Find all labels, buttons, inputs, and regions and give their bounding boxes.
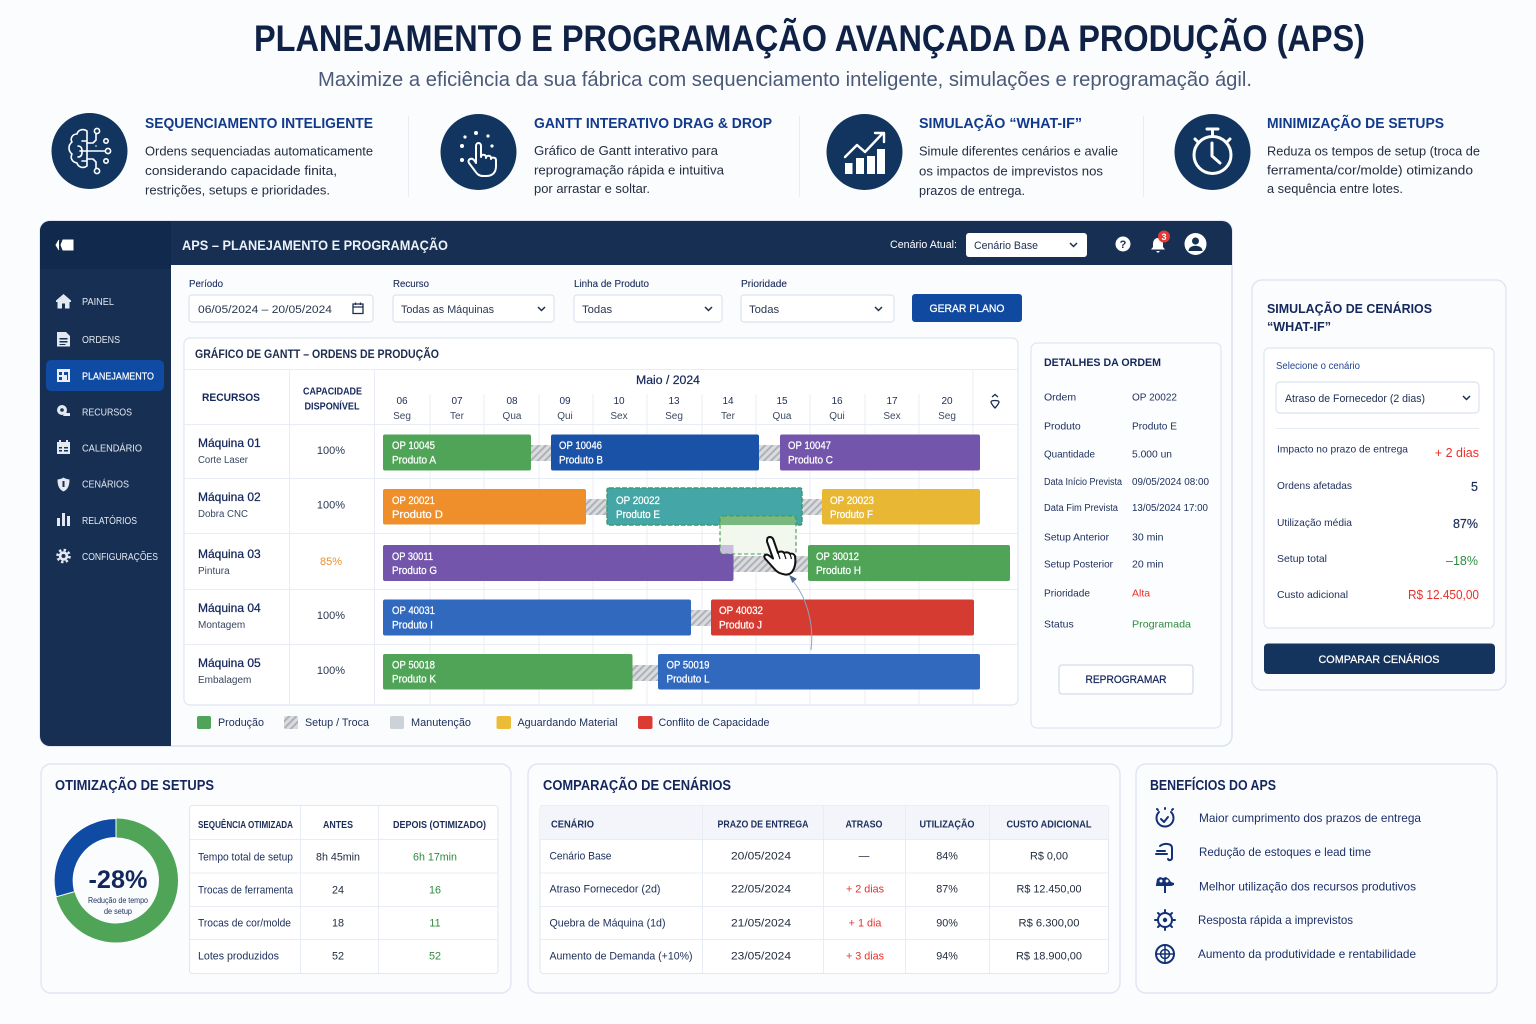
benefit: prazos [1156,808,1421,827]
benefit: estoques [1156,844,1371,860]
timeline days: 17 [886,396,898,407]
capacity values: 100% [317,500,345,512]
metric: ordens afetadas: Ordens afetadas [1277,480,1352,492]
timeline days: Sex [883,411,901,422]
bar: OP 10047: OP 10047 [788,440,831,452]
simulation card [1264,348,1494,628]
scenario select [1276,382,1479,413]
feature: minimizacao de setups [1174,114,1480,196]
bar: OP 10045: OP 10045 [392,440,435,452]
menu: cenarios: CENÁRIOS [82,478,129,490]
bar: OP 40031: OP 40031 [392,605,435,617]
row: atraso fornecedor: Atraso Fornecedor (2d) [550,884,660,896]
row: atraso fornecedor [550,884,1082,896]
timeline days: 08 [506,396,518,407]
app title: APS – PLANEJAMENTO E PROGRAMAÇÃO [182,238,448,253]
row: atraso fornecedor: + 2 dias [846,884,885,896]
bar: OP 50018 [383,654,632,690]
bar: OP 10046: Produto B [559,454,603,466]
metric: utilizacao media: 87% [1453,517,1478,531]
button: gerar plano [912,294,1022,322]
table header: SEQUÊNCIA OTIMIZADA [198,818,293,831]
icon: profile [1184,233,1206,255]
table rows: 11 [429,918,441,930]
details rows: Data Início Prevista [1044,477,1122,488]
benefit: recursos [1156,877,1416,894]
icon: brain circuit [52,113,128,189]
panel: aplicativo APS [40,221,1232,746]
button: comparar cenarios: COMPARAR CENÁRIOS [1318,653,1440,666]
arrow: drag path [790,576,812,650]
metric: setup total [1277,553,1478,568]
timeline days: 15 [776,396,788,407]
description: ferramenta/cor/molde) otimizando [1267,162,1473,178]
bar: OP 50018: OP 50018 [392,660,435,672]
icon: help: ? [1120,239,1127,251]
details rows: Data Fim Prevista [1044,503,1119,514]
timeline days: 10 [613,396,625,407]
bar: OP 50019 [658,654,980,690]
bar: OP 40031 [383,600,691,636]
resources list: Máquina 05 [198,656,261,670]
icon: notifications: 3 [1161,232,1167,242]
table rows [198,852,457,962]
table header [551,818,1092,830]
timeline days: Seg [393,411,411,422]
filter: recurso: Todas as Máquinas [401,304,494,316]
heading: COMPARAÇÃO DE CENÁRIOS [543,776,731,794]
bar: OP 20023: Produto F [830,509,873,521]
feature: sequenciamento inteligente [52,113,373,198]
button: comparar cenarios [1264,644,1495,674]
bar: OP 40031: Produto I [392,620,433,632]
feature: simulacao what-if [826,114,1118,198]
timeline days: 06 [396,396,408,407]
menu: relatorios [57,513,137,527]
metric: ordens afetadas [1277,480,1478,494]
row: atraso fornecedor: 22/05/2024 [731,884,791,896]
table: sequencia otimizada [190,806,498,974]
table rows: 52 [332,950,344,962]
bar: OP 20022 selected: OP 20022 [616,495,660,507]
benefit: produtividade: Aumento da produtividade e rentabilidade [1198,947,1416,961]
legend: producao [197,716,264,729]
description [1267,144,1480,196]
bar: OP 30012: Produto H [816,565,861,577]
menu: ordens [57,332,120,346]
metric: custo adicional: Custo adicional [1277,589,1348,601]
table header: ATRASO [846,820,883,830]
details rows: Setup Posterior [1044,558,1113,570]
filter: periodo: Período [189,278,223,290]
bar: OP 20022 selected [607,488,802,525]
bar: OP 20021 [383,489,586,524]
simulation card: Selecione o cenário [1276,361,1360,372]
details title: DETALHES DA ORDEM [1044,357,1161,369]
description [919,144,1118,198]
resources list [198,436,261,686]
table rows: Trocas de cor/molde [198,918,291,930]
resources list: Corte Laser [198,455,249,466]
bar: OP 10047: Produto C [788,454,833,466]
timeline days: Qua [503,411,522,422]
capacity values: 100% [317,665,345,677]
details rows: Setup Anterior [1044,532,1109,544]
metric: utilizacao media: Utilização média [1277,517,1352,529]
description: considerando capacidade finita, [145,163,337,178]
icon: touch hand [440,114,516,190]
table rows: 24 [332,884,344,896]
bar: OP 20021: OP 20021 [392,495,435,507]
current scenario: Cenário Atual: [890,239,957,251]
resources list: Embalagem [198,675,251,686]
gantt title: GRÁFICO DE GANTT – ORDENS DE PRODUÇÃO [195,348,439,361]
benefit: recursos: Melhor utilização dos recursos produtivos [1199,880,1416,894]
menu: planejamento [57,369,154,382]
panel: grafico de gantt [184,338,1018,705]
metric: custo adicional: R$ 12.450,00 [1408,588,1479,602]
metric: utilizacao media [1277,517,1478,531]
description: os impactos de imprevistos nos [919,164,1103,178]
details rows: 13/05/2024 17:00 [1132,503,1209,514]
menu: relatorios: RELATÓRIOS [82,514,137,527]
button: reprogramar [1059,665,1193,694]
table rows: Trocas de ferramenta [198,884,293,896]
panel title [1267,301,1432,334]
metric: setup total: –18% [1446,554,1478,568]
metric: custo adicional [1277,588,1479,602]
legend [197,716,770,729]
timeline days: 13 [668,396,680,407]
button: reprogramar: REPROGRAMAR [1086,674,1167,686]
timeline days: 16 [831,396,843,407]
bar: OP 20023 [822,489,980,524]
capacity values: 85% [320,556,342,568]
timeline days: 07 [451,396,463,407]
legend: manutencao: Manutenção [411,717,471,729]
setup hatch segments [530,445,823,681]
capacity values [317,445,345,677]
table rows: Tempo total de setup [198,852,293,864]
table rows: 16 [429,884,441,896]
benefit: imprevistos: Resposta rápida a imprevistos [1198,913,1353,927]
table header [198,818,486,831]
legend: aguardando material: Aguardando Material [518,717,618,729]
row: aumento de demanda [550,950,1082,962]
column headers: RECURSOS [202,392,260,404]
icon: help [1116,236,1130,252]
metric: impacto: + 2 dias [1435,446,1479,460]
timeline days: Qui [557,411,573,422]
scenario select: Cenário Base [974,240,1038,252]
filter: periodo: 06/05/2024 – 20/05/2024 [198,304,332,316]
bar: OP 20023: OP 20023 [830,495,874,507]
details rows: 20 min [1132,558,1164,570]
panel: detalhes da ordem [1031,343,1221,728]
row: aumento de demanda: 94% [936,950,958,962]
bar: OP 20022 selected: Produto E [616,509,660,521]
details rows: Alta [1132,588,1150,600]
legend: setup [284,716,370,729]
menu: recursos: RECURSOS [82,406,132,418]
icon: expand [991,394,999,408]
row: atraso fornecedor: 87% [936,884,958,896]
bar: OP 50019: OP 50019 [666,660,710,672]
bar: OP 30012 [808,545,1010,581]
metric: setup total: Setup total [1277,553,1327,565]
bar: OP 30011 [383,545,734,581]
resources list: Pintura [198,566,230,577]
icon: notifications [1151,230,1170,253]
row: cenario base [550,850,1068,862]
icon: stopwatch [1174,114,1250,190]
legend: conflito: Conflito de Capacidade [658,717,770,729]
bar: OP 30011: OP 30011 [392,551,433,563]
panel title: “WHAT-IF” [1267,319,1331,334]
timeline days [393,396,956,422]
row: cenario base: 84% [936,850,958,862]
row: atraso fornecedor: R$ 12.450,00 [1016,884,1082,896]
timeline days: Sex [610,411,628,422]
metric: impacto: Impacto no prazo de entrega [1277,444,1408,456]
benefit: imprevistos [1155,910,1353,930]
bar: OP 50018: Produto K [392,674,437,686]
feature: gantt interativo [440,114,772,196]
row: quebra de maquina: 21/05/2024 [731,918,791,930]
bar: OP 10046: OP 10046 [559,440,602,452]
panel: simulacao de cenarios [1252,280,1506,690]
resources list: Máquina 01 [198,436,261,450]
panel: comparacao de cenarios [528,764,1120,993]
details rows: 09/05/2024 08:00 [1132,477,1210,488]
metric: impacto [1277,444,1479,460]
row: quebra de maquina [550,918,1080,930]
heading: SEQUENCIAMENTO INTELIGENTE [145,115,373,132]
table header: DEPOIS (OTIMIZADO) [393,820,486,831]
heading: MINIMIZAÇÃO DE SETUPS [1267,114,1444,132]
table: cenarios [540,806,1108,974]
row: aumento de demanda: Aumento de Demanda (+10%) [550,950,692,962]
menu: configuracoes: CONFIGURAÇÕES [82,550,158,563]
table header: CENÁRIO [551,818,594,830]
table rows: 6h 17min [413,852,457,864]
menu: calendario [57,440,142,454]
column headers: DISPONÍVEL [304,400,360,412]
menu: recursos [57,405,132,418]
filter: prioridade: Todas [749,304,779,316]
legend: manutencao [390,716,471,729]
table rows: 18 [332,918,344,930]
menu: cenarios [58,478,129,492]
resources list: Dobra CNC [198,509,248,520]
timeline days: Ter [450,411,465,422]
bar: OP 50019: Produto L [666,674,710,686]
subtitle: Maximize a eficiência da sua fábrica com sequenciamento inteligente, simulações e reprogramação ágil. [318,68,1252,91]
details rows: 30 min [1132,532,1164,544]
table header: UTILIZAÇÃO [920,818,975,830]
active item highlight [46,360,164,391]
description: a sequência entre lotes. [1267,181,1403,196]
icon: logo [56,240,73,250]
description: Reduza os tempos de setup (troca de [1267,144,1480,158]
table header: ANTES [323,820,353,831]
row: quebra de maquina: 90% [936,918,958,930]
details rows: Produto E [1132,420,1177,432]
column headers [202,375,701,412]
bar: OP 10045 [383,434,531,470]
details rows: Ordem [1044,392,1076,404]
scenario select: Atraso de Fornecedor (2 dias) [1285,393,1425,405]
benefit: produtividade [1156,945,1416,963]
scenario select [966,233,1087,257]
timeline days: Seg [938,411,956,422]
filter: prioridade: Prioridade [741,278,787,290]
row: aumento de demanda: 23/05/2024 [731,950,791,962]
bar: OP 40032: OP 40032 [719,605,763,617]
description: Ordens sequenciadas automaticamente [145,144,373,158]
table rows: Lotes produzidos [198,950,280,962]
panel title: SIMULAÇÃO DE CENÁRIOS [1267,301,1432,316]
row: cenario base: R$ 0,00 [1030,850,1068,862]
header bar [171,221,1232,265]
filter: linha de produto: Todas [582,304,612,316]
bar: OP 10045: Produto A [392,454,437,466]
capacity values: 100% [317,445,345,457]
bar: OP 30012: OP 30012 [816,551,859,563]
column headers: Maio / 2024 [636,375,701,387]
bar: OP 10047 [780,434,980,470]
panel: beneficios do APS [1136,764,1497,993]
timeline days: Qua [773,411,792,422]
button: gerar plano: GERAR PLANO [930,303,1005,315]
heading: SIMULAÇÃO “WHAT-IF” [919,114,1082,132]
benefit: estoques: Redução de estoques e lead time [1199,845,1371,859]
row: aumento de demanda: R$ 18.900,00 [1016,950,1082,962]
row: cenario base: Cenário Base [550,850,612,862]
details rows [1044,392,1210,630]
column headers: CAPACIDADE [303,386,362,398]
table header: CUSTO ADICIONAL [1006,820,1092,830]
row: quebra de maquina: + 1 dia [849,918,881,930]
heading: GANTT INTERATIVO DRAG & DROP [534,115,772,132]
bar: OP 40032 [711,600,974,636]
icon: drag hand cursor [764,537,795,575]
timeline days: Seg [665,411,683,422]
description: restrições, setups e prioridades. [145,182,330,198]
row: quebra de maquina: R$ 6.300,00 [1018,918,1080,930]
timeline days: Ter [721,411,736,422]
heading: OTIMIZAÇÃO DE SETUPS [55,776,214,794]
details rows: 5.000 un [1132,448,1172,460]
filter: linha de produto [574,278,722,322]
bar: OP 40032: Produto J [719,620,762,632]
resources list: Montagem [198,620,245,631]
drag ghost [720,516,796,554]
resources list: Máquina 02 [198,490,261,504]
timeline days: Qui [829,411,845,422]
description: Simule diferentes cenários e avalie [919,144,1118,158]
menu: configuracoes [58,550,158,563]
details rows: Produto [1044,420,1081,432]
details rows: Quantidade [1044,448,1095,460]
table rows: 8h 45min [316,852,360,864]
bar: OP 20021: Produto D [392,509,443,521]
filter: recurso [393,278,554,322]
filter: recurso: Recurso [393,278,429,290]
panel: otimizacao de setups [41,764,511,993]
details rows: Programada [1132,618,1191,630]
description [534,143,725,196]
description [145,144,373,198]
menu: painel [56,294,114,308]
panel: sidebar [40,221,171,746]
donut chart: -28% [88,866,148,894]
table rows: 52 [429,950,441,962]
donut chart: de setup [104,907,132,916]
heading: BENEFÍCIOS DO APS [1150,777,1276,794]
description: prazos de entrega. [919,183,1025,198]
legend: setup: Setup / Troca [305,717,370,729]
menu: ordens: ORDENS [82,334,120,346]
row: quebra de maquina: Quebra de Máquina (1d) [550,918,666,930]
menu: painel: PAINEL [82,296,114,308]
menu: planejamento: PLANEJAMENTO [82,370,154,382]
icon: growth chart [826,114,902,190]
capacity values: 100% [317,610,345,622]
filter: linha de produto: Linha de Produto [574,278,649,290]
timeline days: 14 [722,396,734,407]
metric: ordens afetadas: 5 [1471,480,1478,494]
details rows: OP 20022 [1132,392,1177,404]
row: cenario base: 20/05/2024 [731,850,791,862]
description: Gráfico de Gantt interativo para [534,143,719,158]
filter: periodo [189,278,373,322]
legend: producao: Produção [218,717,264,729]
description: reprogramação rápida e intuitiva [534,162,725,178]
donut chart: Redução de tempo [88,896,148,905]
timeline days: 09 [559,396,571,407]
bar: OP 30011: Produto G [392,565,437,577]
resources list: Máquina 03 [198,547,261,561]
details rows: Status [1044,618,1074,630]
title: PLANEJAMENTO E PROGRAMAÇÃO AVANÇADA DA PRODUÇÃO (APS) [254,17,1365,59]
table header: PRAZO DE ENTREGA [718,820,808,830]
filter: prioridade [741,278,894,322]
bar: OP 10046 [551,434,759,470]
resources list: Máquina 04 [198,601,261,615]
benefit: prazos: Maior cumprimento dos prazos de entrega [1199,811,1421,825]
donut chart [54,818,168,933]
details rows: Prioridade [1044,588,1090,600]
menu: calendario: CALENDÁRIO [82,442,142,454]
timeline days: 20 [941,396,953,407]
description: por arrastar e soltar. [534,181,650,196]
row: aumento de demanda: + 3 dias [846,950,885,962]
row: cenario base: — [859,850,870,862]
